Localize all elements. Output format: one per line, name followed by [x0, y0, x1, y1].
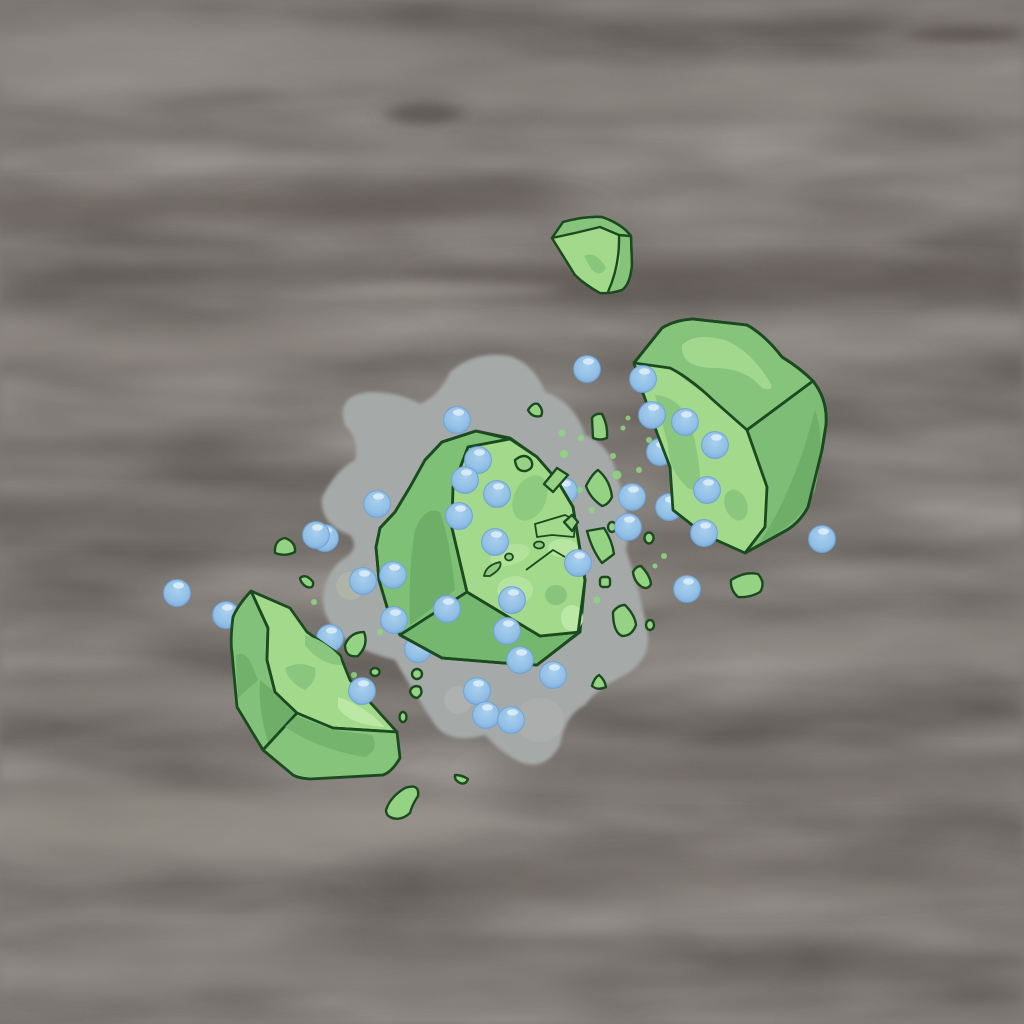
right chunk: top face highlight	[682, 337, 771, 389]
right chunk: inner face blotches	[655, 395, 752, 524]
top small chunk	[552, 217, 632, 293]
left chunk: bottom face	[263, 713, 400, 779]
right chunk: side face	[745, 381, 826, 553]
central chunk	[376, 431, 585, 665]
right chunk: inner fracture face	[634, 363, 767, 553]
bubbles in front	[164, 356, 835, 733]
bubbles behind the chunks	[213, 439, 682, 662]
central chunk: fracture face blotches	[488, 469, 583, 631]
dust cloud behind the central chunk	[322, 355, 648, 765]
central chunk: fracture face	[452, 439, 585, 636]
central chunk: left face	[376, 431, 510, 635]
right large chunk	[634, 319, 826, 553]
central chunk: internal cracks and shards	[484, 515, 575, 576]
left large chunk	[231, 591, 400, 779]
left chunk: fracture face	[251, 591, 397, 732]
scattered rock fragments	[275, 404, 763, 819]
central chunk: bottom face	[400, 592, 580, 665]
right chunk: top face	[634, 319, 813, 430]
green spore particles	[311, 416, 667, 678]
left chunk: outer face	[231, 591, 297, 750]
